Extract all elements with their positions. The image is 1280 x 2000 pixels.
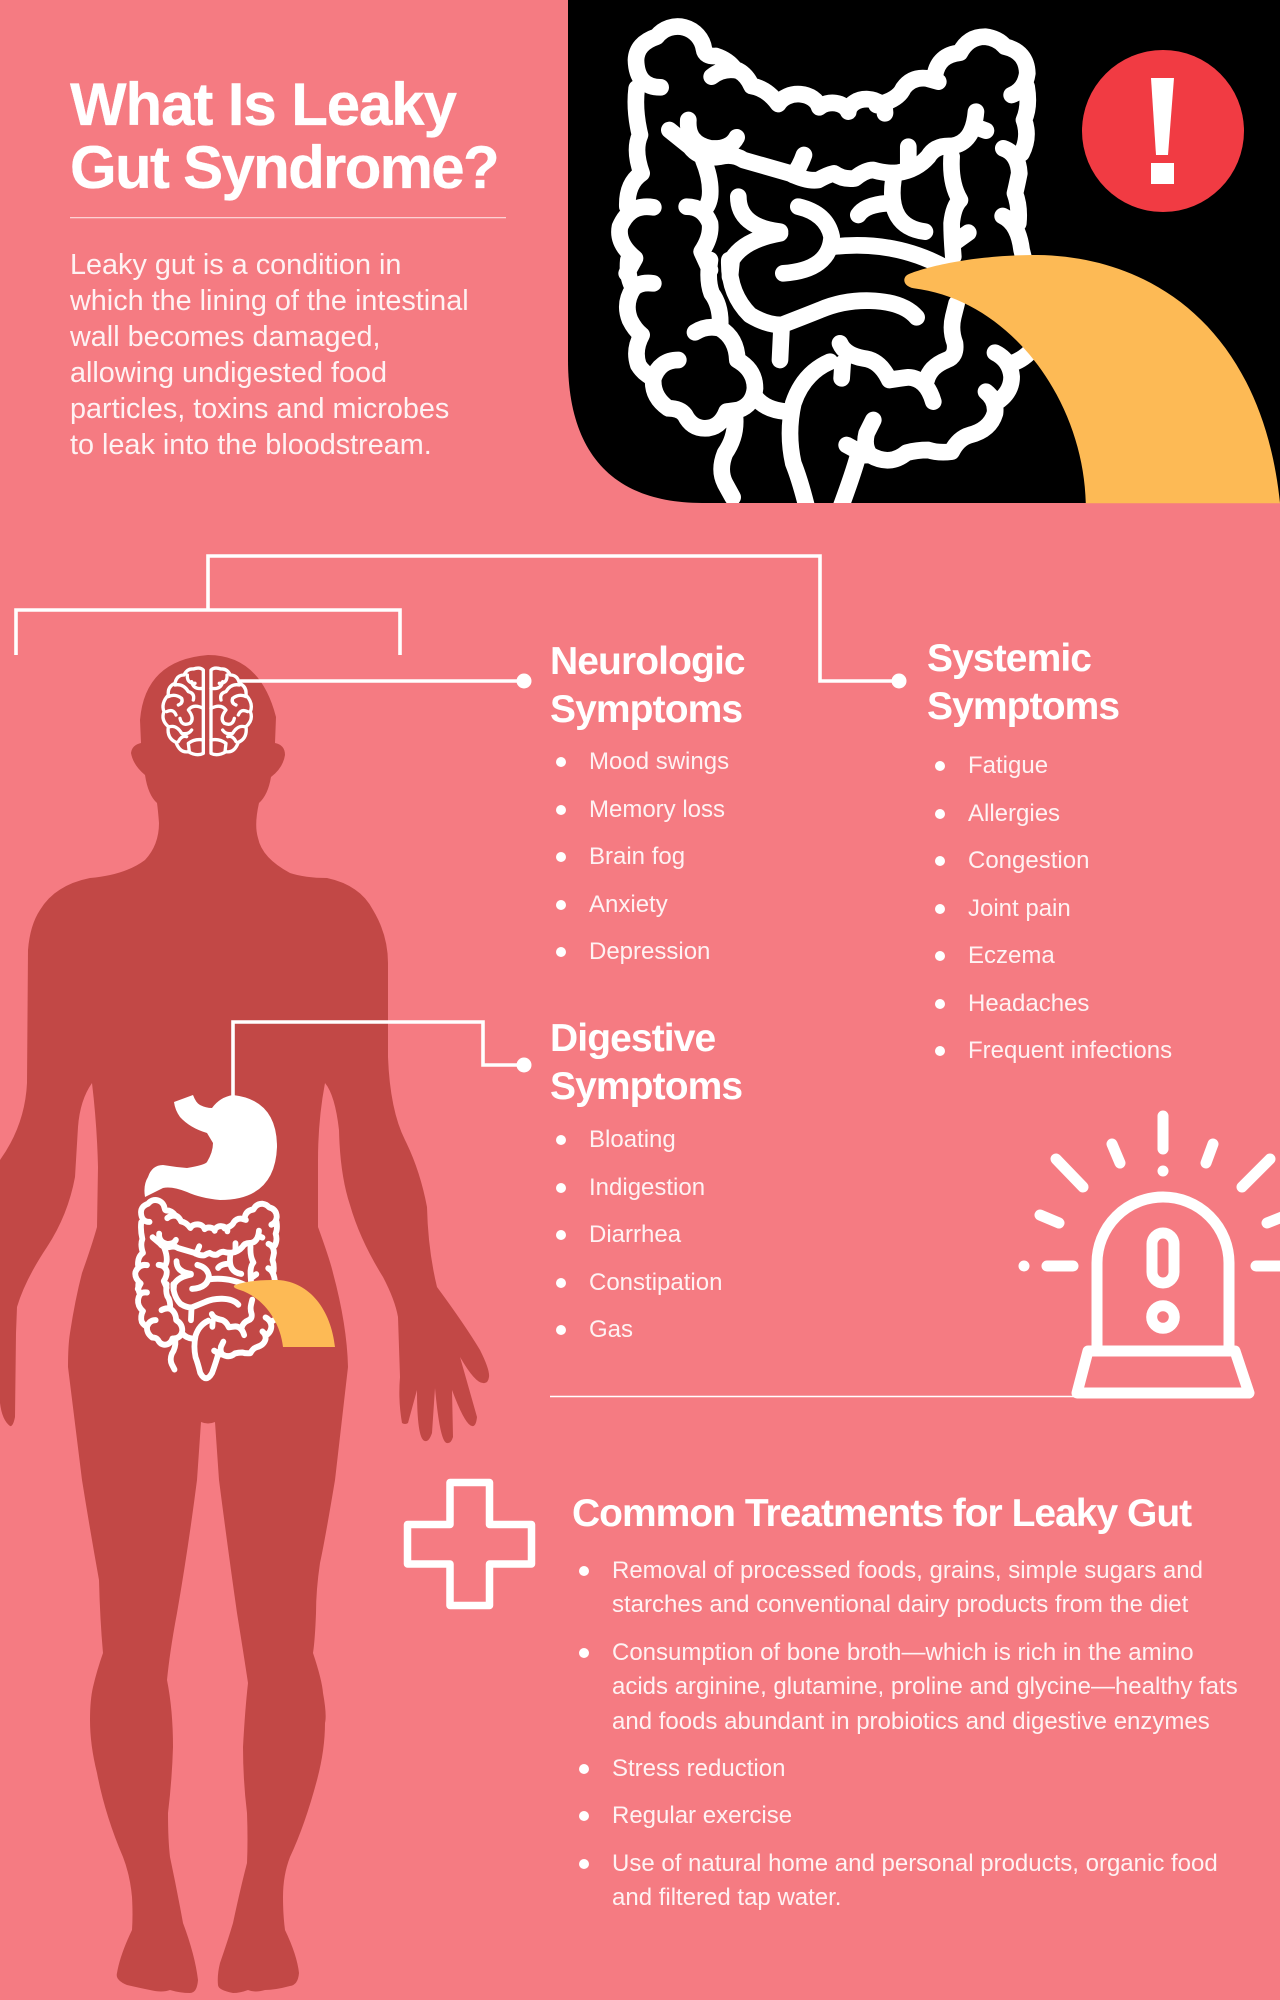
list: treatments xyxy=(579,1557,1238,1911)
icon: medical cross xyxy=(408,1482,532,1606)
list: neurologic symptoms xyxy=(556,748,729,965)
arrow: dot for systemic symptoms xyxy=(892,674,906,688)
heading: neurologic: Neurologic xyxy=(550,640,745,683)
intro text block: to leak into the bloodstream. xyxy=(70,429,432,461)
panel: systemic symptoms xyxy=(927,637,1172,1064)
title rule xyxy=(70,217,506,219)
icon: yellow inflamed area xyxy=(904,255,1280,503)
heading: systemic: Systemic xyxy=(927,637,1091,680)
heading: digestive xyxy=(550,1017,742,1108)
list: systemic symptoms xyxy=(935,752,1172,1064)
intro text block: allowing undigested food xyxy=(70,357,387,389)
list: treatments: Removal of processed foods, grains, simple sugars and xyxy=(612,1557,1203,1584)
list: treatments: Regular exercise xyxy=(612,1802,792,1829)
list: digestive symptoms: Constipation xyxy=(589,1268,722,1296)
icon: large intestine outline xyxy=(619,27,1033,522)
heading: digestive: Digestive xyxy=(550,1017,715,1060)
list: digestive symptoms: Bloating xyxy=(589,1126,676,1153)
divider line xyxy=(550,1396,1075,1398)
list: systemic symptoms: Congestion xyxy=(968,847,1089,874)
panel: treatments xyxy=(572,1492,1238,1911)
icon: alarm siren xyxy=(1018,1116,1280,1393)
icon: stomach xyxy=(144,1095,277,1200)
body silhouette xyxy=(0,655,489,1993)
list: neurologic symptoms: Brain fog xyxy=(589,843,685,870)
list: treatments: acids arginine, glutamine, proline and glycine—healthy fats xyxy=(612,1673,1238,1700)
title xyxy=(70,71,498,201)
intro text block: Leaky gut is a condition in xyxy=(70,249,401,281)
intro text block: wall becomes damaged, xyxy=(70,321,381,353)
arrow: stomach to digestive symptoms xyxy=(233,1022,532,1098)
list: digestive symptoms xyxy=(556,1126,722,1343)
list: systemic symptoms: Frequent infections xyxy=(968,1037,1172,1064)
heading: systemic xyxy=(927,637,1119,728)
list: neurologic symptoms: Anxiety xyxy=(589,890,668,918)
heading: neurologic: Symptoms xyxy=(550,688,742,731)
list: treatments: and filtered tap water. xyxy=(612,1884,841,1911)
list: systemic symptoms: Eczema xyxy=(968,942,1055,969)
arrow: bracket connector to systemic symptoms xyxy=(16,556,899,681)
list: treatments: Consumption of bone broth—which is rich in the amino xyxy=(612,1639,1194,1666)
list: treatments: Stress reduction xyxy=(612,1755,785,1782)
list: digestive symptoms: Gas xyxy=(589,1316,633,1343)
list: digestive symptoms: Indigestion xyxy=(589,1174,705,1200)
panel: black intestine panel xyxy=(568,0,1280,522)
heading: neurologic xyxy=(550,640,745,731)
heading: treatments: Common Treatments for Leaky Gut xyxy=(572,1492,1191,1535)
list: systemic symptoms: Fatigue xyxy=(968,752,1048,779)
panel: neurologic symptoms xyxy=(550,640,745,965)
icon: small yellow inflamed area xyxy=(234,1280,335,1347)
list: digestive symptoms: Diarrhea xyxy=(589,1221,681,1248)
title: What Is Leaky xyxy=(70,71,456,138)
intro text block: particles, toxins and microbes xyxy=(70,393,449,425)
list: systemic symptoms: Joint pain xyxy=(968,894,1071,922)
list: systemic symptoms: Headaches xyxy=(968,990,1089,1016)
heading: digestive: Symptoms xyxy=(550,1065,742,1108)
intro text block: which the lining of the intestinal xyxy=(70,285,469,317)
list: treatments: starches and conventional dairy products from the diet xyxy=(612,1591,1188,1618)
title: Gut Syndrome? xyxy=(70,134,498,201)
list: neurologic symptoms: Mood swings xyxy=(589,748,729,775)
icon: red alert circle xyxy=(1082,50,1244,212)
arrow: brain to neurologic symptoms xyxy=(240,674,532,688)
icon: small intestine xyxy=(135,1200,279,1378)
list: neurologic symptoms: Memory loss xyxy=(589,796,725,822)
intro text block xyxy=(70,249,469,461)
list: treatments: Use of natural home and personal products, organic food xyxy=(612,1850,1218,1877)
icon: brain xyxy=(163,668,251,755)
list: treatments: and foods abundant in probiotics and digestive enzymes xyxy=(612,1708,1210,1735)
list: neurologic symptoms: Depression xyxy=(589,938,710,965)
panel: digestive symptoms xyxy=(550,1017,742,1343)
heading: systemic: Symptoms xyxy=(927,685,1119,728)
list: systemic symptoms: Allergies xyxy=(968,800,1060,826)
